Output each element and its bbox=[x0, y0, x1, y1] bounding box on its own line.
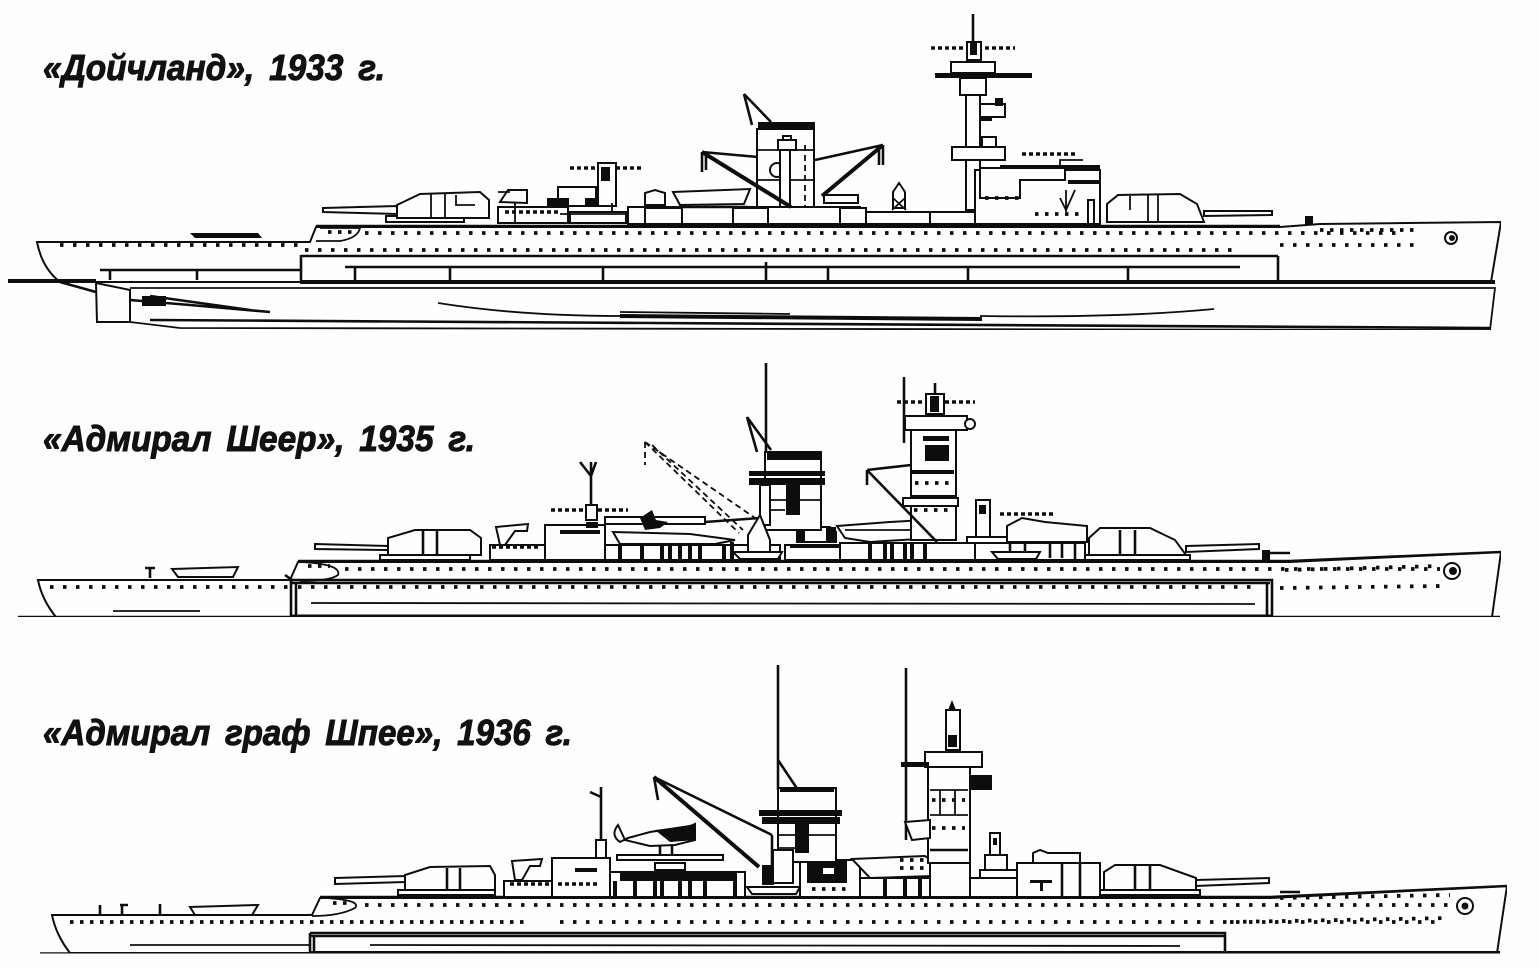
searchlight tower bbox=[985, 833, 1007, 870]
bridge superstructure bbox=[930, 154, 1100, 224]
hull bbox=[18, 552, 1501, 617]
foremast tower and crane bbox=[867, 377, 975, 542]
ship drawing: Deutschland 1933 bbox=[8, 14, 1501, 330]
funnel with mast and dashed crane bbox=[645, 363, 825, 552]
portholes bbox=[60, 230, 1420, 250]
forward turret and gun bbox=[1107, 194, 1313, 224]
forward turret bbox=[1100, 865, 1269, 895]
heading: Admiral Scheer 1935: «Адмирал Шеер», 1935 г. bbox=[43, 418, 475, 459]
heading: Admiral Graf Spee 1936: «Адмирал граф Шпее», 1936 г. bbox=[43, 712, 572, 753]
hull bbox=[40, 886, 1507, 954]
foremast tower bbox=[901, 668, 992, 897]
boats and amidships deckhouses bbox=[628, 183, 960, 224]
forward turret bbox=[1082, 528, 1270, 560]
aircraft on catapult bbox=[614, 824, 723, 870]
funnel with boom and cranes bbox=[702, 94, 883, 207]
funnel, mast and crane bbox=[654, 665, 842, 885]
aft superstructure bbox=[498, 163, 644, 223]
aft turret bbox=[335, 866, 495, 895]
ship drawing: Admiral Graf Spee 1936 bbox=[40, 665, 1507, 954]
foremast tower bbox=[931, 14, 1032, 210]
deckhouses bbox=[610, 850, 1100, 897]
ship drawing: Admiral Scheer 1935 bbox=[18, 363, 1501, 617]
small searchlight tower bbox=[976, 500, 990, 537]
aircraft on catapult and boat bbox=[605, 510, 760, 544]
deckhouses bbox=[605, 514, 1087, 560]
portholes bbox=[70, 895, 1450, 922]
heading: Deutschland 1933: «Дойчланд», 1933 г. bbox=[43, 47, 385, 88]
hull above water bbox=[8, 222, 1501, 282]
aft superstructure and control post bbox=[490, 462, 628, 560]
aft turret bbox=[323, 192, 489, 222]
portholes bbox=[50, 566, 1440, 588]
aft superstructure bbox=[504, 787, 610, 897]
underwater hull bbox=[60, 282, 1495, 330]
aft turret bbox=[315, 530, 481, 560]
